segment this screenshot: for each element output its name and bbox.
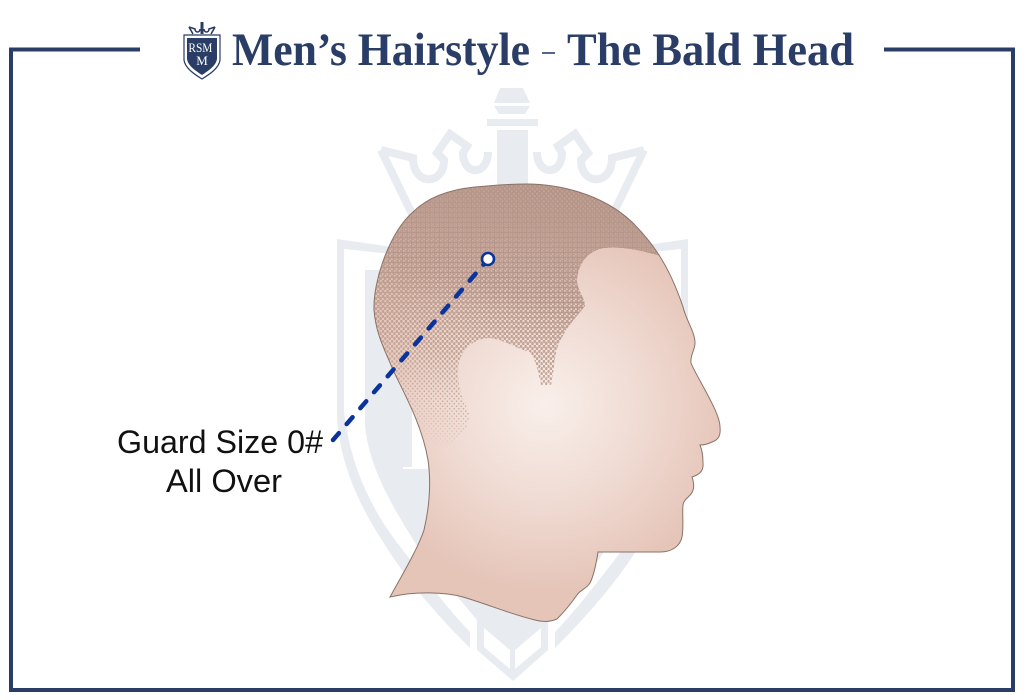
callout leader line (333, 264, 484, 440)
logo: monogram: RSM (188, 40, 213, 55)
watermark: crown (381, 134, 644, 218)
logo: shield outline (184, 35, 220, 79)
watermark: chevron cut-outs (484, 628, 541, 669)
watermark: tower (487, 88, 538, 190)
logo: crown (189, 22, 215, 34)
head: shaved hair stipple (374, 184, 659, 444)
callout marker (482, 253, 494, 265)
head: outline (374, 184, 720, 621)
head: skin silhouette (374, 184, 720, 621)
logo: monogram: M (196, 53, 208, 68)
title: Men’s Hairstyle (232, 24, 530, 76)
head profile (373, 184, 721, 622)
watermark: crest behind the head (337, 88, 688, 681)
watermark: shield outer band (337, 239, 688, 648)
callout label: All Over (166, 463, 282, 499)
watermark: bottom chevron (477, 618, 548, 681)
title: The Bald Head (567, 24, 854, 76)
watermark: letter serif (403, 405, 428, 469)
callout label: Guard Size 0# (117, 424, 323, 460)
logo: shield fill (187, 38, 217, 75)
watermark: shield solid centre (365, 270, 660, 620)
logo crest (184, 22, 220, 79)
title dash (542, 52, 555, 54)
